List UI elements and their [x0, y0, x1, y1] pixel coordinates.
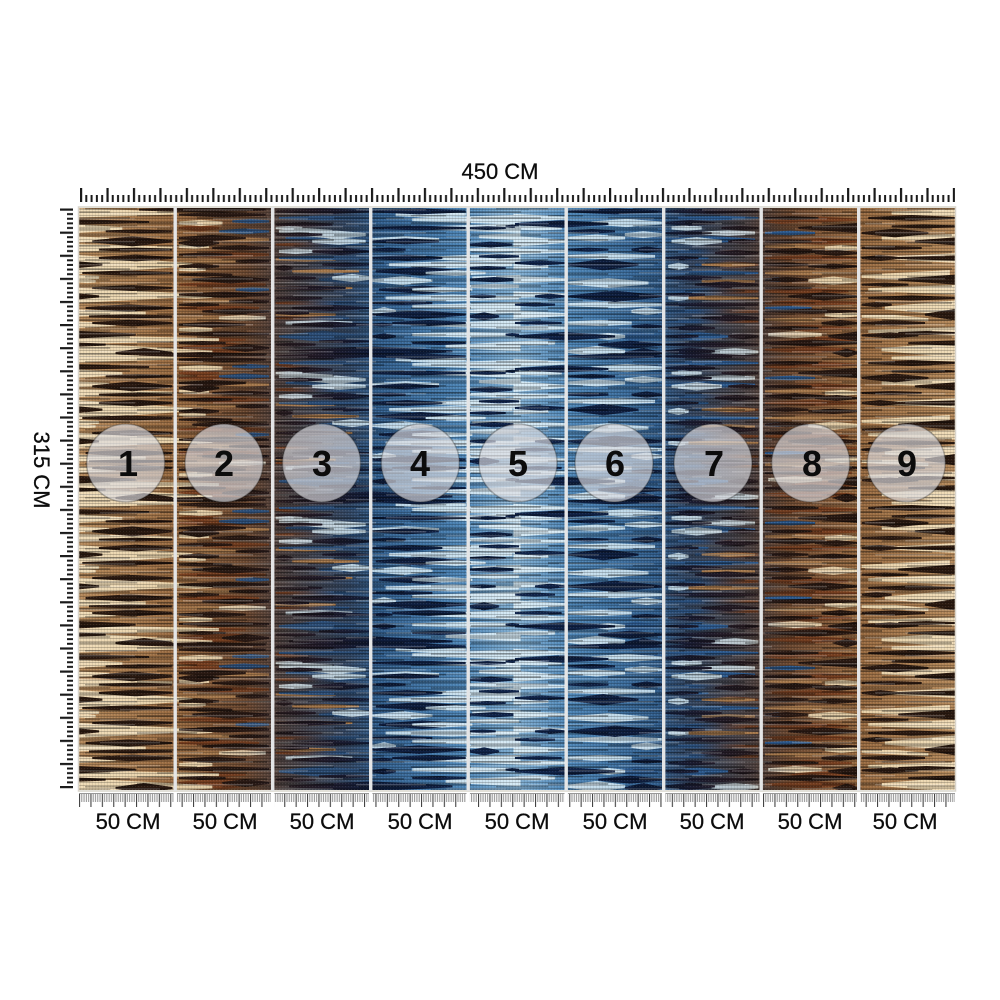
panel width labels: 50 CM: [193, 809, 257, 834]
panel width labels: 50 CM: [96, 809, 160, 834]
top ruler: [80, 188, 955, 202]
panel width labels: 50 CM: [873, 809, 937, 834]
badge 7: [674, 424, 752, 502]
panel width labels: 50 CM: [680, 809, 744, 834]
panel width labels: 50 CM: [485, 809, 549, 834]
badge 1: [87, 424, 165, 502]
badge 4: [381, 424, 459, 502]
badge 8: 8: [802, 443, 822, 484]
badge 5: 5: [508, 443, 528, 484]
badge 3: [282, 424, 360, 502]
panel width labels: 50 CM: [388, 809, 452, 834]
panel width labels: 50 CM: [583, 809, 647, 834]
badge 8: [772, 424, 850, 502]
panel divider lines: [174, 207, 860, 791]
badge 2: 2: [214, 443, 234, 484]
badge 9: 9: [897, 443, 917, 484]
numbered panel badges: [87, 424, 945, 502]
panel width labels: [96, 809, 937, 834]
badge 2: [185, 424, 263, 502]
badge 6: [575, 424, 653, 502]
title: total width 450 CM: 450 CM: [461, 159, 539, 184]
panel width labels: 50 CM: [778, 809, 842, 834]
badge 1: 1: [118, 443, 138, 484]
badge 3: 3: [312, 443, 332, 484]
panel: woven zigzag wallpaper pattern: [79, 208, 955, 815]
left ruler: [60, 208, 73, 790]
badge 7: 7: [704, 443, 724, 484]
height label 315 CM: 315 CM: [29, 431, 54, 509]
badge 9: [867, 424, 945, 502]
badge 6: 6: [605, 443, 625, 484]
panel width labels: 50 CM: [290, 809, 354, 834]
bottom ruler: [79, 792, 955, 808]
badge 4: 4: [410, 443, 430, 484]
badge 5: [479, 424, 557, 502]
